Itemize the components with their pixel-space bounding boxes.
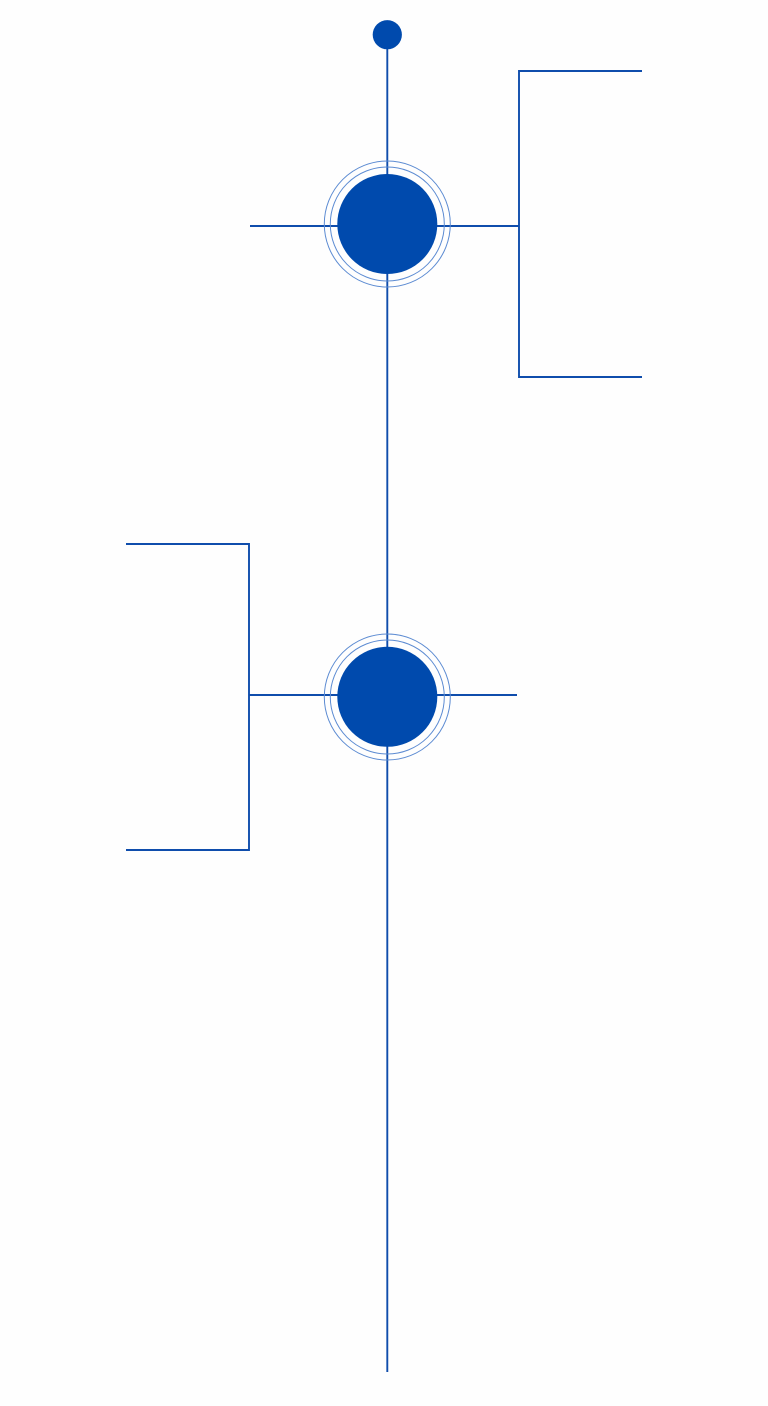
connector: node 1 horizontal <box>250 225 519 227</box>
vertical timeline line <box>386 40 388 1372</box>
outer rings node 2 <box>324 634 450 760</box>
filled circle node 1 <box>337 174 437 274</box>
top start dot <box>373 20 402 49</box>
bracket: right <box>519 71 642 377</box>
outer rings node 1 <box>324 161 450 287</box>
connector: node 2 horizontal <box>249 694 517 696</box>
bracket: left <box>126 544 249 850</box>
node 2 with connectors and left bracket <box>126 544 517 850</box>
node 1 with connectors and right bracket <box>250 71 642 377</box>
filled circle node 2 <box>337 647 437 747</box>
